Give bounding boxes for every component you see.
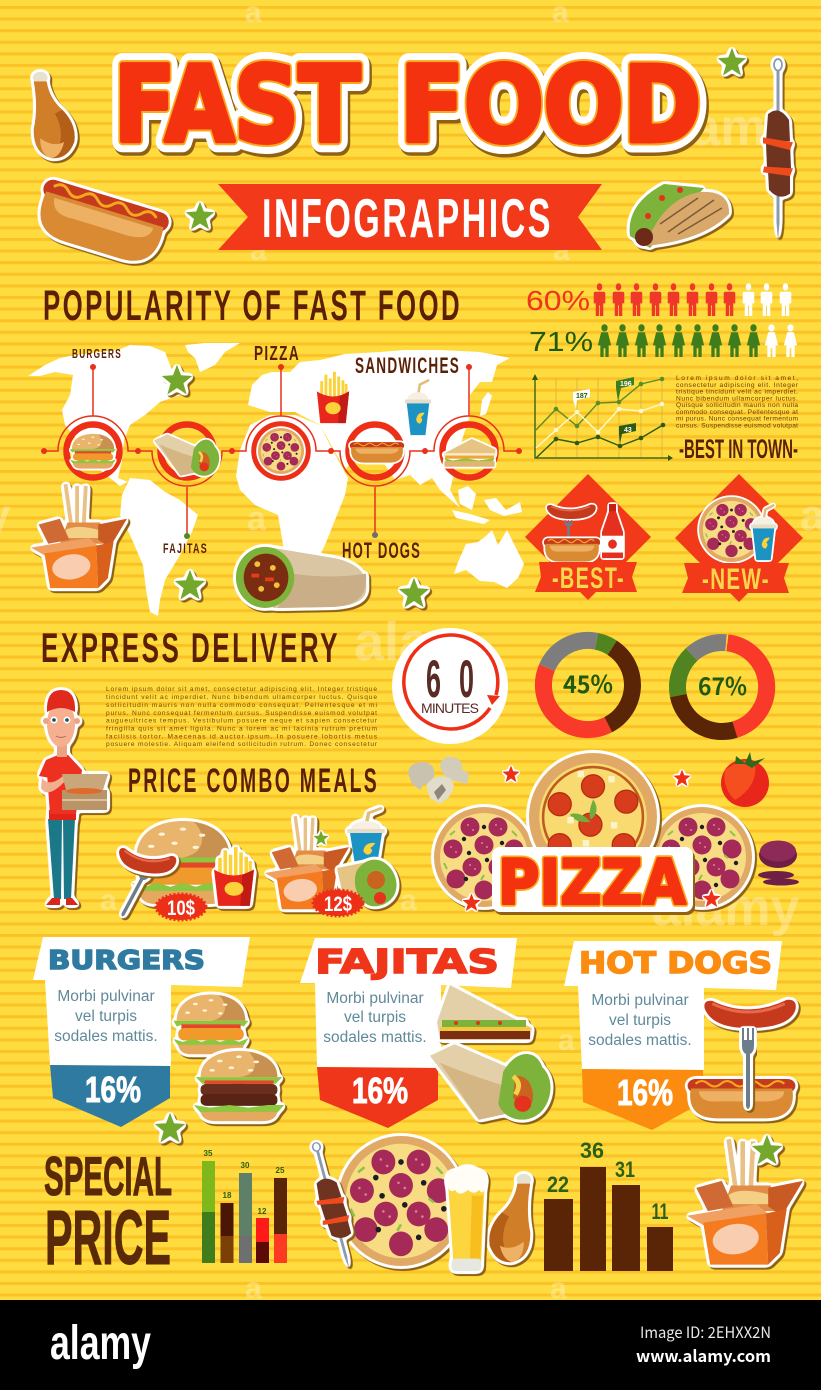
subtitle ribbon [218, 184, 602, 250]
footer bar: www.alamy.com [636, 1343, 771, 1367]
title: FAST FOOD [114, 44, 703, 169]
heading: express delivery: EXPRESS DELIVERY [41, 624, 340, 671]
text: small chart paragraph: commodo consequat. Pellentesque at [676, 409, 798, 416]
icon: pizza [258, 428, 304, 474]
line chart [532, 374, 673, 461]
watermark marks: alamy [648, 99, 796, 157]
card: hot dogs: Morbi pulvinar [591, 992, 689, 1009]
red star 2 [673, 769, 691, 786]
icon: star bottom right [752, 1135, 782, 1164]
text: delivery paragraph: facilisis tortor. Maecenas id auctor ipsum. In posuere lobortis metus [106, 734, 378, 740]
combo meal: 10 dollars: 10$ [167, 897, 195, 920]
title: FAST FOOD: FOOD [400, 44, 701, 166]
text: delivery paragraph: augueultrices tempus. Vestibulum posuere neque et sapien consectetur [106, 718, 378, 724]
text: small chart paragraph: tristique tincidunt velit ac imperdiet. [676, 388, 798, 396]
icon: drumstick [33, 72, 75, 158]
line chart: 187 [576, 393, 588, 400]
icon: salami slices [758, 840, 799, 886]
icon: noodle box bottom right [687, 1139, 803, 1265]
watermark marks: a [553, 234, 570, 267]
icon: noodle box [31, 484, 127, 588]
donut chart: 67 percent: 67% [698, 667, 747, 702]
card: hot dogs [564, 941, 796, 1130]
stacked bar chart: 12 [258, 1207, 267, 1216]
card: fajitas: sodales mattis. [323, 1029, 427, 1046]
subtitle ribbon: INFOGRAPHICS [262, 187, 553, 249]
heading: price combo meals: PRICE COMBO MEALS [128, 762, 379, 800]
red star 1 [502, 765, 520, 782]
footer bar: alamy [50, 1317, 151, 1370]
icon: large pizza [338, 1136, 464, 1266]
text: delivery paragraph: fringilla quis sit amet ligula. Nunc a lorem ac mi lacinia rutrum pretium [106, 726, 377, 732]
icon: star top right [718, 48, 746, 76]
text: small chart paragraph: Quisque sollicitudin mauris non nulla [676, 402, 798, 409]
icon: star on map 1 [162, 365, 192, 394]
card: burgers: sodales mattis. [54, 1028, 158, 1045]
stat: 71 percent women pictogram: 71% [529, 326, 593, 357]
line chart: 196 [620, 381, 632, 388]
watermark marks: a [100, 884, 117, 917]
heading: special price: SPECIAL [44, 1145, 172, 1207]
timer: 60 minutes: 0 [459, 650, 474, 709]
watermark marks: alam [354, 612, 477, 672]
icon: star beside hot dog [186, 202, 214, 230]
text: small chart paragraph: Nunc bibendum ullamcorper luctus. [676, 395, 798, 402]
bar chart with values: 36 [580, 1138, 604, 1163]
stacked bar chart [202, 1149, 287, 1263]
icon: star on map 2 [175, 570, 205, 599]
icon: hot dog in ring [350, 442, 404, 463]
pizza group [434, 753, 799, 919]
pizza sign: PIZZA [498, 846, 686, 919]
icon: burger [70, 434, 116, 469]
stat: 60 percent men pictogram: 60% [526, 285, 590, 316]
footer bar [0, 1300, 821, 1390]
donut chart: 67 percent [677, 643, 767, 732]
text: delivery paragraph: posuere molestie. Aliquam eleifend sollicitudin rutrum. Donec consectetur [106, 741, 378, 748]
icon: hot dog [30, 177, 171, 269]
badge: new: -NEW- [702, 563, 770, 596]
card: burgers: vel turpis [75, 1008, 137, 1025]
watermark marks: a [398, 104, 419, 145]
card: fajitas: 16% [352, 1070, 408, 1111]
card: burgers: Morbi pulvinar [57, 988, 155, 1005]
card: hot dogs: 16% [617, 1072, 673, 1113]
bar chart with values: 31 [615, 1157, 635, 1182]
watermark marks: a [400, 884, 417, 917]
title: FAST FOOD: FAST [114, 44, 360, 166]
text: small chart paragraph: mi purus. Nunc consequat fermentum [676, 416, 798, 423]
title: FAST FOOD: FOOD [400, 44, 701, 166]
timer: 60 minutes: 6 [426, 650, 441, 709]
text: small chart paragraph: consectetur adipiscing elit. Integer [676, 382, 799, 389]
icon: drumstick behind beer [489, 1174, 531, 1262]
pizza sign: PIZZA [498, 846, 686, 919]
map labels: HOT DOGS [342, 538, 421, 563]
icon: centre pepperoni pizza [529, 753, 657, 881]
map food icons [31, 365, 495, 608]
map labels: BURGERS [72, 346, 122, 361]
icon: taco [630, 184, 729, 248]
bar chart with values: 11 [652, 1199, 668, 1224]
title: FAST FOOD: FAST [116, 47, 362, 169]
icon: beer [447, 1167, 486, 1271]
bar chart with values: 22 [547, 1172, 569, 1197]
badge: new [675, 474, 803, 602]
bar chart with values [544, 1138, 673, 1271]
icon: fajita roll [154, 434, 219, 476]
icon: cup [405, 380, 431, 435]
card: hot dogs: HOT DOGS [579, 946, 772, 980]
donut chart: 45 percent [543, 640, 633, 730]
title: FAST FOOD: FAST [114, 44, 360, 166]
card: fajitas: Morbi pulvinar [326, 990, 424, 1007]
badge: best: -BEST- [552, 562, 625, 595]
badge: best [525, 474, 651, 600]
watermark marks: alamy [652, 879, 800, 937]
stacked bar chart: 35 [204, 1149, 213, 1158]
watermark marks: a [245, 1272, 262, 1305]
card: hot dogs: vel turpis [609, 1012, 671, 1029]
text: delivery paragraph [106, 686, 378, 748]
icon: right salami pizza [652, 807, 752, 907]
donut chart: 45 percent: 45% [563, 665, 613, 700]
footer bar: Image ID: 2EHXX2N [640, 1321, 771, 1343]
text: small chart paragraph [676, 375, 799, 429]
map callouts and rings [41, 364, 522, 539]
icon: burrito [236, 547, 366, 608]
card: burgers [33, 937, 284, 1142]
title: FAST FOOD: FOOD [402, 47, 703, 169]
stat: 60 percent men pictogram [526, 283, 791, 316]
text: delivery paragraph: Lorem ipsum dolor sit amet, consectetur adipiscing elit. Integer tristique [106, 686, 377, 693]
icon: fries [317, 372, 349, 423]
heading: special price [44, 1145, 172, 1281]
text: small chart paragraph: Lorem ipsum dolor sit amet, [676, 375, 798, 382]
icon: mushrooms [408, 757, 469, 804]
icon: skewer top right [763, 59, 793, 240]
heading: special price: PRICE [45, 1195, 171, 1281]
icon: star on map 3 [399, 578, 429, 607]
watermark marks: a [250, 234, 267, 267]
text: delivery paragraph: sollicitudin mauris non nulla commodo consequat. Pellentesque et mi [106, 702, 378, 709]
card: hot dogs: sodales mattis. [588, 1032, 692, 1049]
timer: 60 minutes: MINUTES [421, 700, 479, 716]
stat: 71 percent women pictogram [529, 324, 797, 357]
map labels: PIZZA [254, 343, 300, 365]
timer: 60 minutes [392, 628, 508, 744]
map labels: SANDWICHES [355, 353, 460, 378]
text: delivery paragraph: purus. Nunc consequat fermentum cursus. Suspendisse euismod volutpat [106, 710, 377, 717]
icon: left salami pizza [434, 807, 534, 907]
card: fajitas: vel turpis [344, 1009, 406, 1026]
watermark marks: a [247, 500, 267, 538]
stacked bar chart: 30 [241, 1161, 250, 1170]
card: fajitas: FAJITAS [315, 942, 499, 981]
title: FAST FOOD: FAST [114, 44, 360, 166]
red star 4 [702, 889, 721, 907]
stacked bar chart: 18 [223, 1191, 232, 1200]
map labels: FAJITAS [163, 540, 208, 556]
text: small chart paragraph: cursus. Suspendisse euismod volutpat [676, 422, 798, 429]
watermark marks: a [550, 1272, 567, 1305]
icon: skewer bottom [302, 1139, 363, 1272]
card: burgers: BURGERS [48, 946, 205, 976]
map labels [72, 343, 460, 563]
line chart: 43 [624, 427, 632, 434]
watermark marks: a [558, 1024, 575, 1057]
combo meal: 12 dollars: 12$ [324, 893, 352, 916]
character: delivery man [39, 690, 108, 905]
title: FAST FOOD: FOOD [400, 44, 701, 166]
stacked bar chart: 25 [276, 1166, 285, 1175]
text: delivery paragraph: tincidunt velit ac imperdiet. Nunc bibendum ullamcorper luctus. Quisque [106, 694, 377, 701]
icon: sandwich [444, 439, 495, 467]
combo meal: 12 dollars [265, 808, 397, 916]
card: burgers: 16% [85, 1069, 141, 1110]
card: fajitas [300, 938, 551, 1128]
red star 3 [462, 893, 481, 911]
combo meal: 10 dollars [116, 821, 254, 920]
world map [28, 343, 524, 616]
icon: tomato [721, 752, 769, 807]
heading: popularity of fast food: POPULARITY OF FAST FOOD [43, 282, 462, 330]
